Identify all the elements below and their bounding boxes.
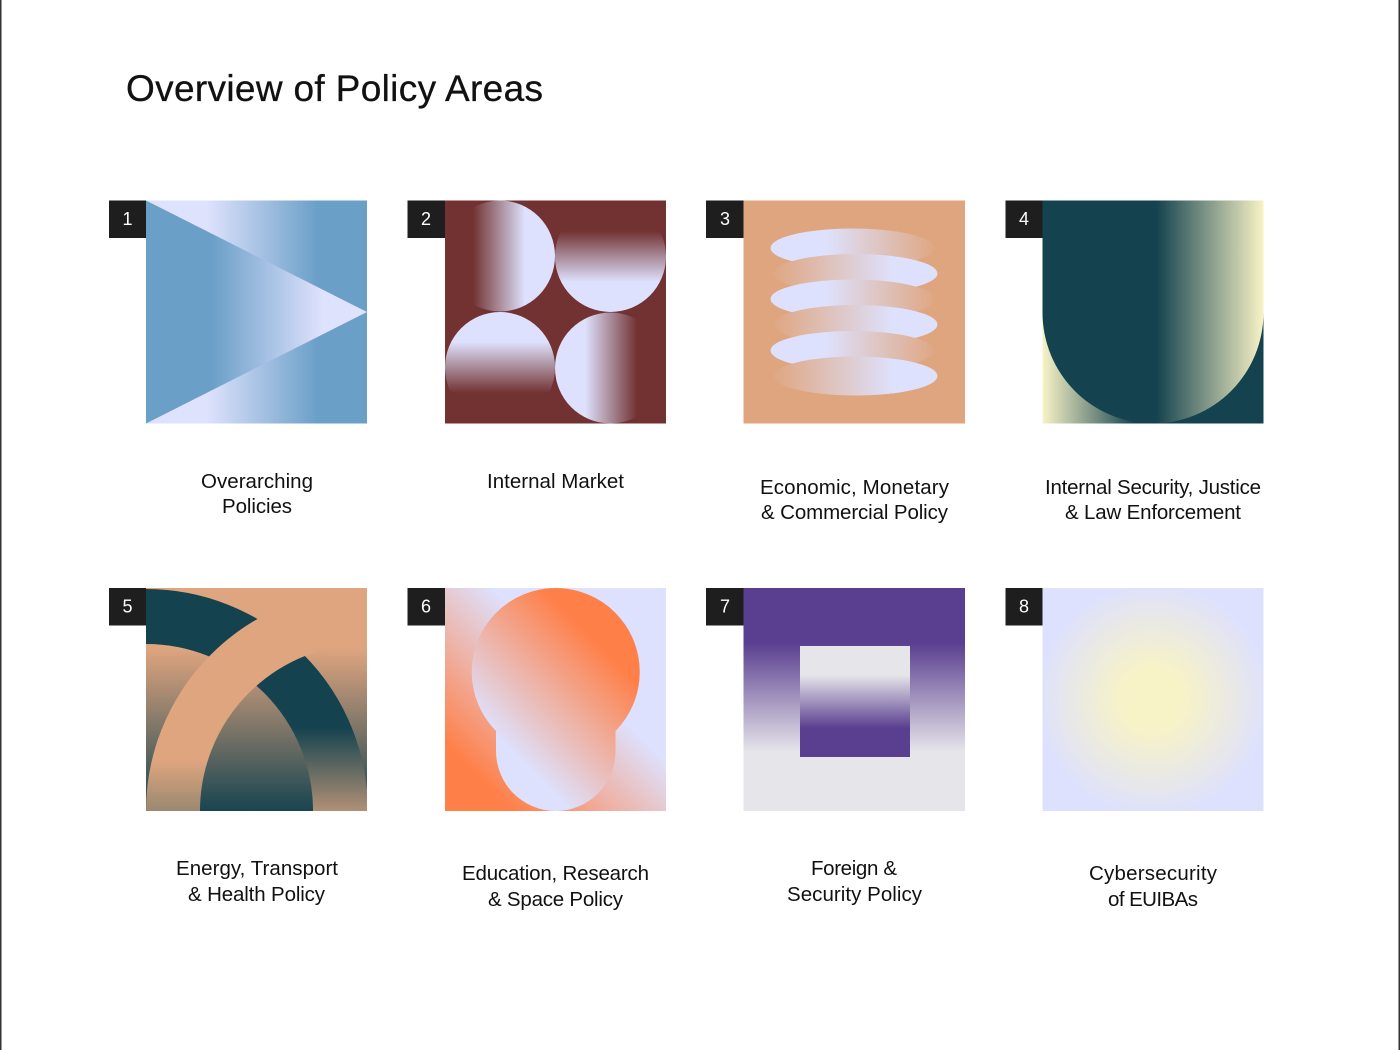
label: Energy, Transport and Health Policy: & Health Policy	[188, 883, 326, 906]
badge 2: 2	[421, 209, 431, 229]
keyhole shape	[472, 588, 640, 811]
label: Education, Research and Space Policy: & Space Policy	[488, 888, 624, 911]
label: Energy, Transport and Health Policy	[176, 857, 338, 906]
label: Internal Security, Justice and Law Enforcement: Internal Security, Justice	[1045, 476, 1261, 499]
badge 4	[1006, 200, 1042, 238]
badge 6: 6	[421, 596, 431, 616]
panel 2: Internal Market	[408, 200, 666, 493]
panel 1: Overarching Policies	[109, 200, 367, 518]
label: Overarching Policies: Policies	[222, 495, 292, 518]
label: Education, Research and Space Policy: Education, Research	[462, 862, 649, 885]
badge 4: 4	[1019, 209, 1029, 229]
badge 3: 3	[720, 209, 730, 229]
badge 5	[109, 588, 146, 626]
badge 7: 7	[720, 596, 730, 616]
badge 8: 8	[1019, 596, 1029, 616]
inner square	[800, 646, 910, 757]
panel 4: Internal Security, Justice and Law Enforcement	[1006, 200, 1264, 524]
badge 5: 5	[122, 596, 133, 616]
peach ring	[146, 619, 306, 811]
label: Economic, Monetary and Commercial Policy: Economic, Monetary	[760, 476, 950, 499]
badge 1	[109, 200, 146, 238]
panel 5: Energy, Transport and Health Policy	[109, 588, 367, 905]
circle top right	[555, 201, 666, 312]
badge 2	[408, 200, 445, 238]
triangle	[146, 200, 367, 424]
badge 3	[706, 200, 744, 238]
dark ring	[146, 589, 367, 811]
label: Foreign and Security Policy: Foreign &	[811, 857, 897, 880]
label: Overarching Policies	[201, 470, 313, 518]
label: Foreign and Security Policy	[787, 857, 923, 906]
label: Internal Security, Justice and Law Enforcement: & Law Enforcement	[1065, 501, 1241, 524]
label: Overarching Policies: Overarching	[201, 470, 313, 493]
label: Energy, Transport and Health Policy: Energy, Transport	[176, 857, 338, 880]
label: Internal Security, Justice and Law Enforcement	[1045, 476, 1261, 524]
label: Economic, Monetary and Commercial Policy: & Commercial Policy	[761, 501, 949, 524]
label: Cybersecurity of EUIBAs	[1089, 862, 1218, 911]
panel 8: Cybersecurity of EUIBAs	[1006, 588, 1264, 911]
badge 7	[706, 588, 744, 626]
stacked ellipses	[770, 228, 938, 396]
circle bottom left	[445, 312, 555, 423]
title: Overview of Policy Areas	[126, 68, 543, 109]
label: Cybersecurity of EUIBAs: of EUIBAs	[1108, 888, 1198, 911]
label: Cybersecurity of EUIBAs: Cybersecurity	[1089, 862, 1218, 885]
circle bottom right	[555, 312, 666, 424]
panel 3: Economic, Monetary and Commercial Policy	[706, 200, 965, 524]
label: Education, Research and Space Policy	[462, 862, 649, 911]
panel 6: Education, Research and Space Policy	[408, 588, 666, 911]
badge 6	[408, 588, 445, 626]
panel 7: Foreign and Security Policy	[706, 588, 965, 906]
badge 1: 1	[122, 209, 133, 229]
label: Economic, Monetary and Commercial Policy	[760, 476, 950, 524]
badge 8	[1006, 588, 1042, 626]
arch shape	[1042, 200, 1264, 424]
label: Foreign and Security Policy: Security Policy	[787, 883, 923, 906]
circle top left	[445, 200, 555, 312]
label: Internal Market: Internal Market	[487, 470, 624, 493]
